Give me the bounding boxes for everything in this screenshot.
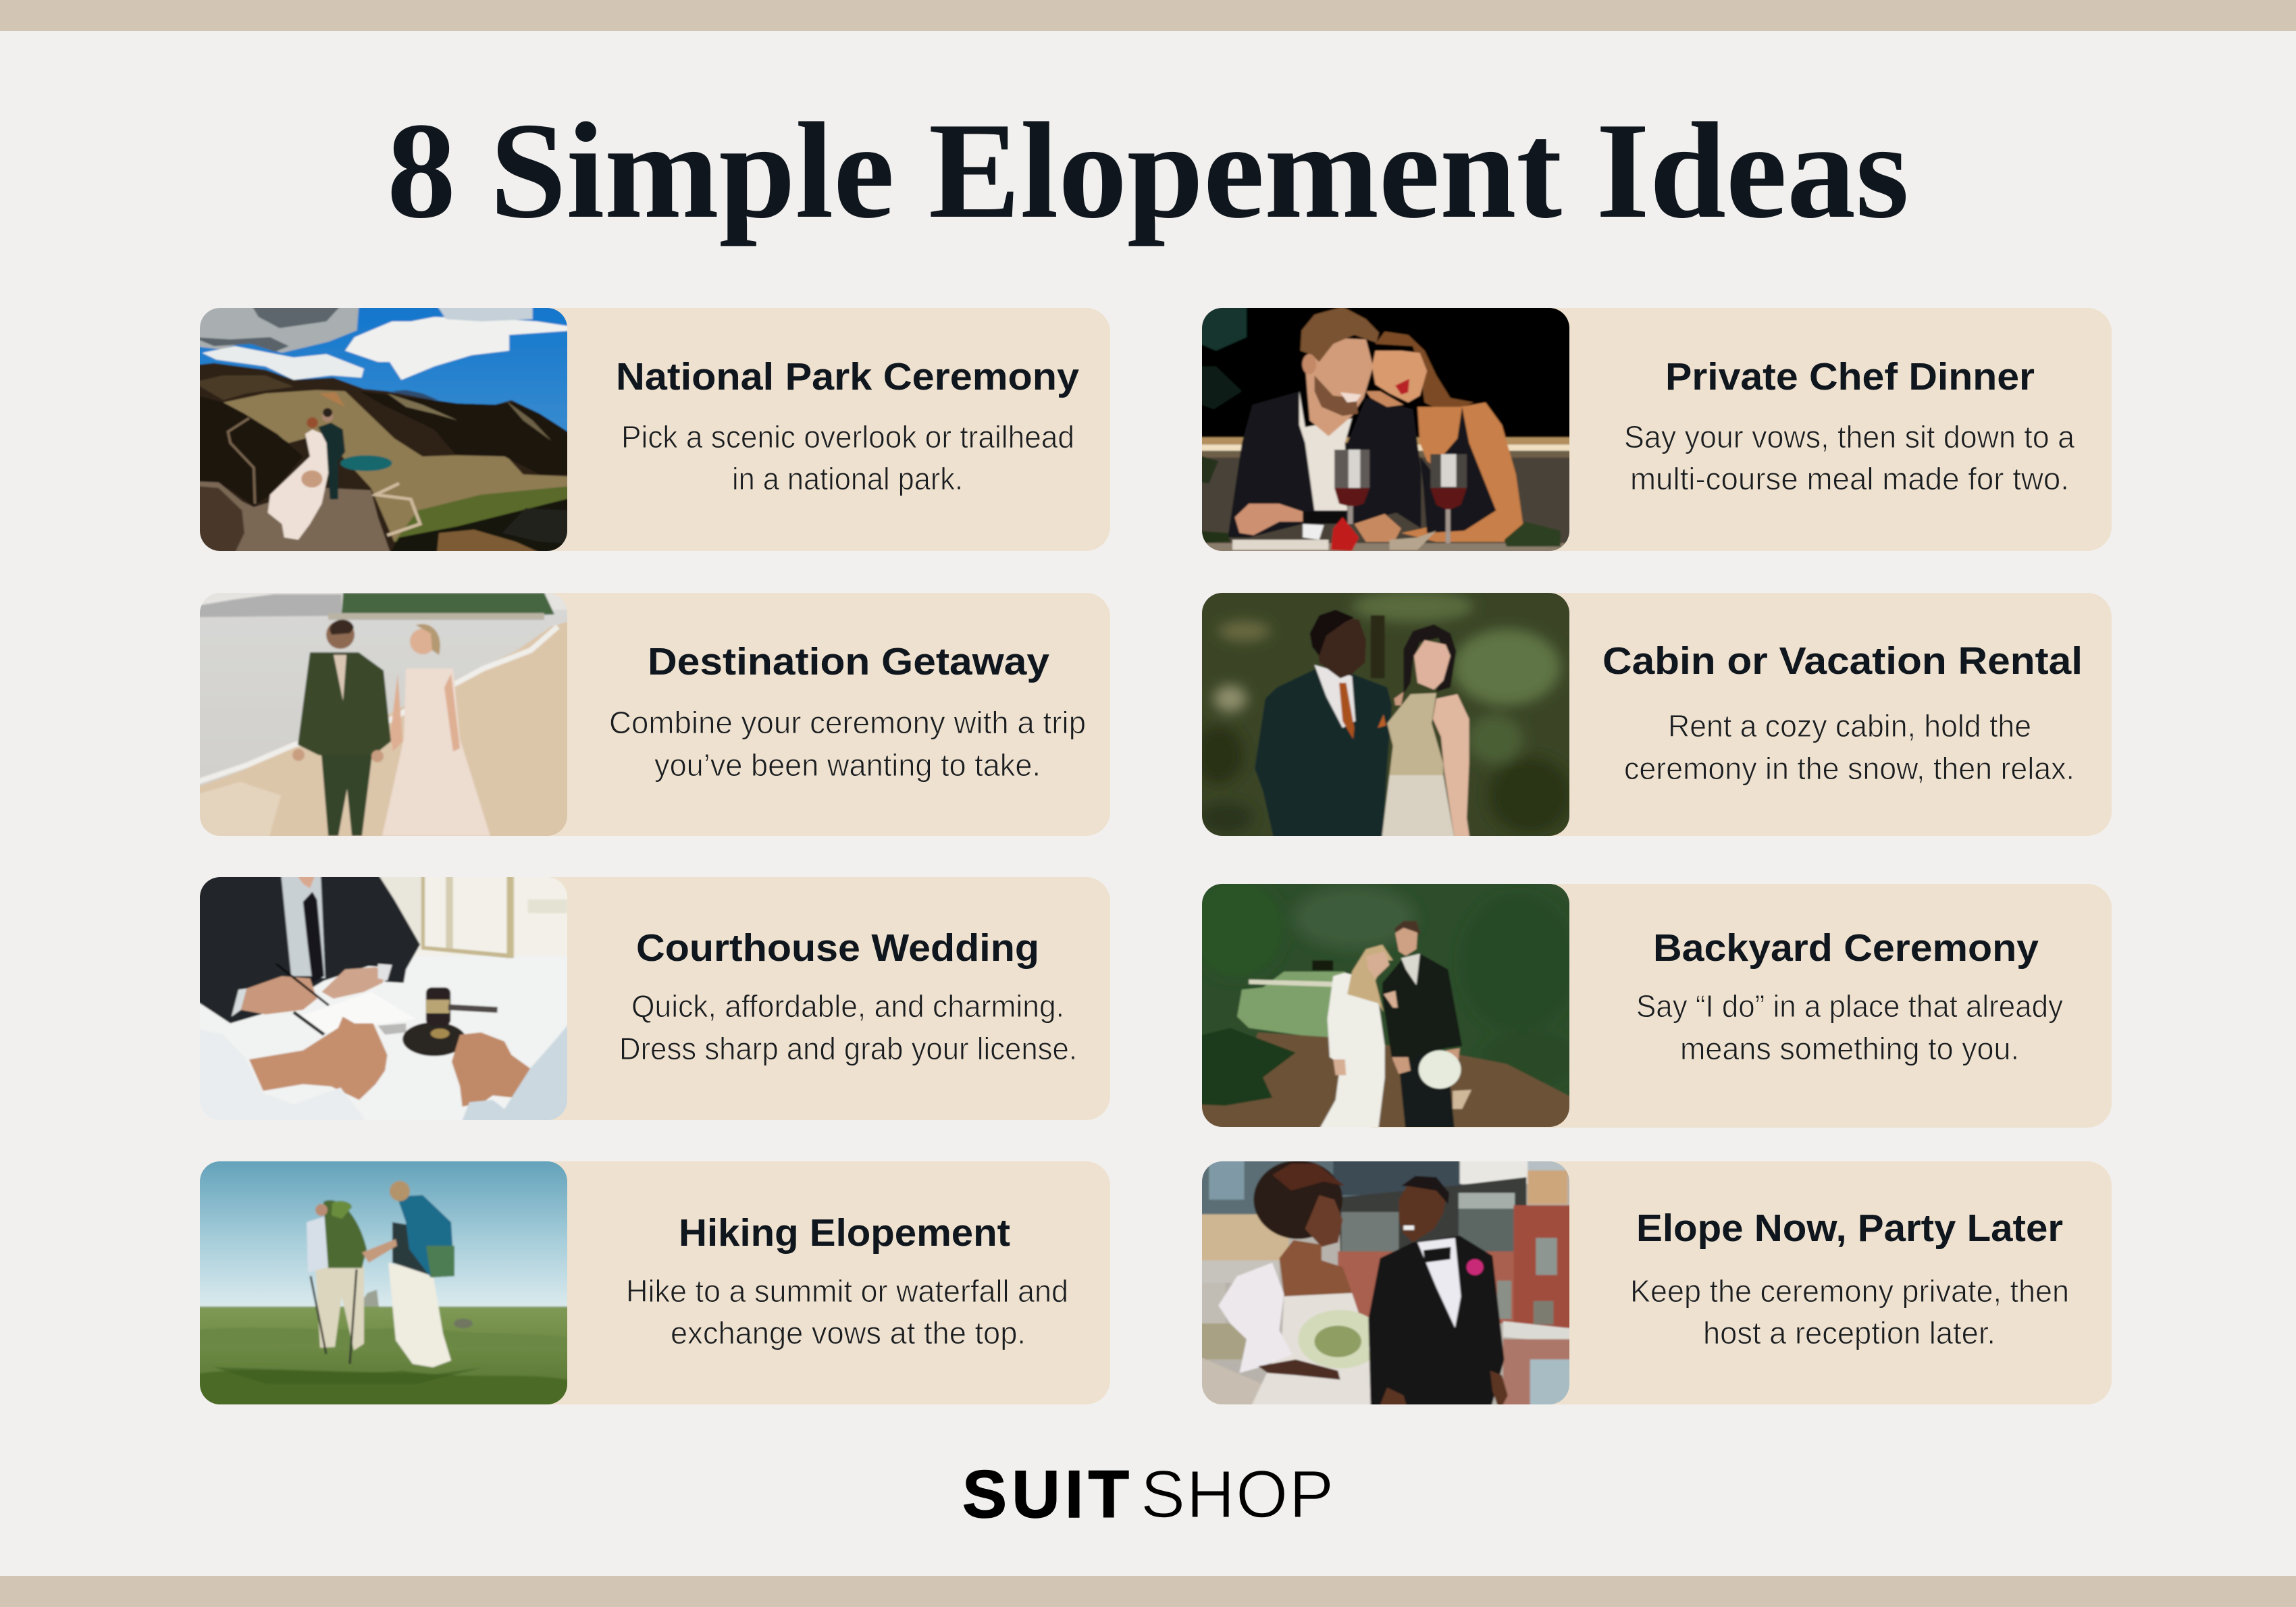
heading: Hiking Elopement bbox=[679, 1211, 1010, 1255]
heading: Destination Getaway bbox=[648, 640, 1049, 683]
photo: couple walking on a beach bbox=[193, 586, 574, 843]
description: multi-course meal made for two. bbox=[1630, 461, 2069, 496]
heading: Private Chef Dinner bbox=[1665, 355, 2035, 398]
panel: Destination Getaway bbox=[193, 586, 1110, 843]
heading: National Park Ceremony bbox=[616, 355, 1079, 398]
photo: signing a marriage license at a desk bbox=[193, 870, 575, 1127]
heading: Backyard Ceremony bbox=[1653, 926, 2039, 970]
logo: SUITSHOP: SUIT bbox=[962, 1456, 1129, 1531]
panel: Courthouse Wedding bbox=[193, 870, 1110, 1127]
photo: couple on a mountain overlook bbox=[193, 301, 575, 558]
panel: Elope Now, Party Later bbox=[1195, 1155, 2112, 1411]
description: exchange vows at the top. bbox=[671, 1315, 1026, 1350]
photo: couple at a candlelit dinner bbox=[1195, 301, 1577, 558]
photo: couple among pine trees bbox=[1193, 586, 1577, 843]
description: you’ve been wanting to take. bbox=[654, 747, 1041, 783]
description: Say your vows, then sit down to a bbox=[1624, 419, 2075, 454]
description: Keep the ceremony private, then bbox=[1630, 1273, 2069, 1309]
panel: Private Chef Dinner bbox=[1195, 301, 2112, 558]
description: Dress sharp and grab your license. bbox=[619, 1031, 1077, 1066]
top band bbox=[0, 0, 2296, 31]
panel: Cabin or Vacation Rental bbox=[1193, 586, 2112, 843]
description: Say “I do” in a place that already bbox=[1636, 989, 2063, 1024]
description: Pick a scenic overlook or trailhead bbox=[621, 419, 1074, 454]
logo: SUITSHOP: SHOP bbox=[1141, 1456, 1334, 1531]
description: host a reception later. bbox=[1703, 1315, 1995, 1350]
description: in a national park. bbox=[732, 461, 963, 496]
title: 8 Simple Elopement Ideas bbox=[387, 95, 1909, 247]
description: Combine your ceremony with a trip bbox=[609, 705, 1086, 740]
heading: Courthouse Wedding bbox=[636, 926, 1039, 970]
panel: Hiking Elopement bbox=[193, 1155, 1110, 1415]
panel: National Park Ceremony bbox=[193, 301, 1110, 558]
description: Quick, affordable, and charming. bbox=[631, 989, 1064, 1024]
bottom band bbox=[0, 1576, 2296, 1607]
panel: Backyard Ceremony bbox=[1191, 877, 2112, 1134]
description: Hike to a summit or waterfall and bbox=[626, 1273, 1068, 1309]
logo: SUITSHOP bbox=[962, 1456, 1334, 1531]
photo: hikers in a green field bbox=[193, 1155, 574, 1415]
photo: couple in a leafy garden bbox=[1191, 877, 1577, 1134]
photo: couple on a city rooftop bbox=[1195, 1155, 1577, 1411]
heading: Elope Now, Party Later bbox=[1636, 1207, 2063, 1250]
description: means something to you. bbox=[1680, 1031, 2019, 1066]
description: ceremony in the snow, then relax. bbox=[1624, 751, 2075, 786]
description: Rent a cozy cabin, hold the bbox=[1668, 708, 2031, 743]
heading: Cabin or Vacation Rental bbox=[1602, 639, 2083, 683]
